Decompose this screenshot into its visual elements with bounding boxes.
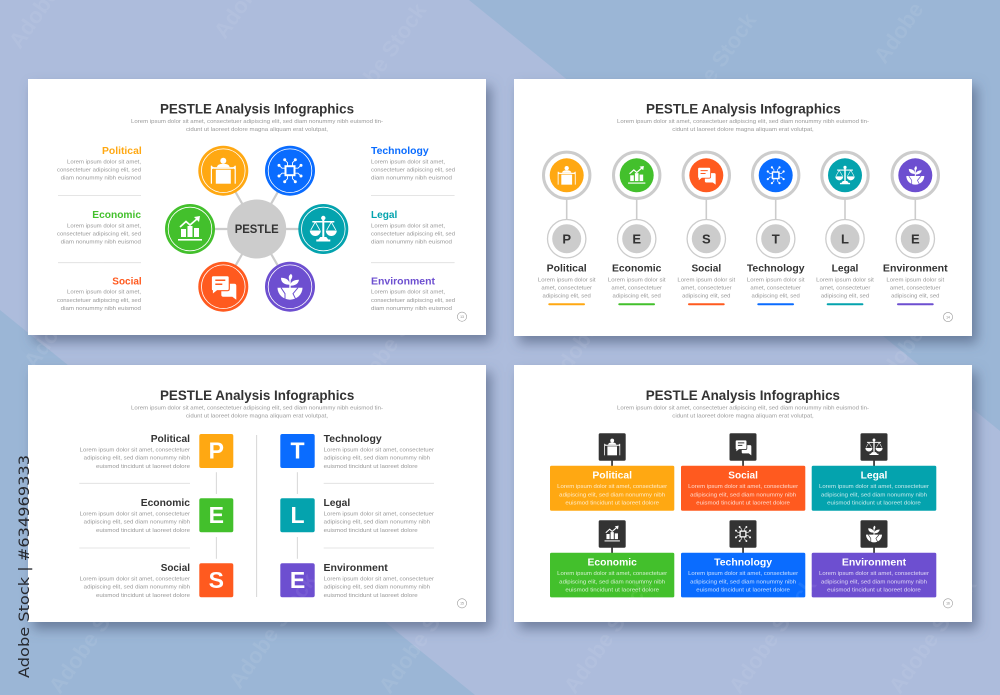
right text: Technology: Technology xyxy=(371,146,429,157)
block: Technology xyxy=(280,434,434,470)
subtitle: Lorem ipsum dolor sit amet, consectetuer adipiscing elit, sed diam nonummy nibh euismod tin- xyxy=(131,119,383,125)
subtitle: cidunt ut laoreet dolore magna aliquam erat volutpat, xyxy=(672,127,814,133)
column: Economic: Lorem ipsum dolor sit xyxy=(608,277,666,283)
left text: Political: Lorem ipsum dolor sit amet, xyxy=(67,159,141,165)
watermark: repeated stock text: Adobe Stock xyxy=(344,278,442,403)
block: Environment: euismod tincidunt ut laoreet dolore xyxy=(324,593,418,599)
right text: Technology: diam nonummy nibh euismod xyxy=(371,176,452,182)
right text: Technology: Lorem ipsum dolor sit amet, xyxy=(371,159,445,165)
right text: Environment: diam nonummy nibh euismod xyxy=(371,306,452,312)
page number xyxy=(457,312,467,321)
block: Social: Social xyxy=(161,563,190,574)
column: Legal: amet, consectetuer xyxy=(820,286,870,292)
subtitle xyxy=(617,405,869,419)
watermark: repeated stock text: Adobe Stock xyxy=(884,573,982,695)
card: Legal xyxy=(812,433,936,511)
page number xyxy=(943,312,953,322)
right text: Environment: Environment xyxy=(371,277,436,288)
right text: Technology xyxy=(371,146,455,182)
title: PESTLE Analysis Infographics xyxy=(160,388,355,403)
left text: Social: consectetuer adipiscing elit, sed xyxy=(57,298,141,304)
column: Social: Lorem ipsum dolor sit xyxy=(677,277,736,283)
title: PESTLE Analysis Infographics xyxy=(160,102,354,116)
block: Technology: adipiscing elit, sed diam nonummy nibh xyxy=(324,456,430,462)
column: Political: amet, consectetuer xyxy=(541,286,592,292)
card: Economic: adipiscing elit, sed diam nonummy nibh xyxy=(559,579,665,585)
block: Environment xyxy=(280,563,434,599)
card: Technology: Technology xyxy=(714,558,772,569)
block: Technology: T xyxy=(290,438,305,464)
column: Technology: T xyxy=(772,231,780,246)
column: Legal: Legal xyxy=(832,264,858,275)
page number xyxy=(457,599,467,608)
stock id side label: Adobe Stock | #634969333 xyxy=(17,455,33,678)
panel: letter squares slide xyxy=(28,365,486,622)
subtitle: Lorem ipsum dolor sit amet, consectetuer adipiscing elit, sed diam nonummy nibh euismod tin- xyxy=(131,405,383,411)
right text: Environment xyxy=(371,277,455,312)
card: Technology xyxy=(681,520,805,597)
watermark: repeated stock text: Adobe Stock xyxy=(724,573,822,695)
block: Legal: euismod tincidunt ut laoreet dolore xyxy=(324,528,418,534)
subtitle: Lorem ipsum dolor sit amet, consectetuer adipiscing elit, sed diam nonummy nibh euismod tin- xyxy=(617,119,869,125)
watermark: repeated stock text: Adobe Stock xyxy=(869,268,967,393)
card: Political: Lorem ipsum dolor sit amet, consectetuer xyxy=(557,484,667,490)
column: Legal: L xyxy=(841,231,849,246)
block: Social: Lorem ipsum dolor sit amet, consectetuer xyxy=(80,576,190,582)
right text: Environment: consectetuer adipiscing elit, sed xyxy=(371,298,455,304)
right text: Legal xyxy=(371,210,455,246)
page number: 14 xyxy=(946,315,950,319)
page number xyxy=(943,599,953,608)
card: Political: adipiscing elit, sed diam nonummy nibh xyxy=(559,492,665,498)
right text: Technology: consectetuer adipiscing elit, sed xyxy=(371,167,455,173)
watermark: repeated stock text: Adobe Stock xyxy=(374,573,472,695)
page number: 15 xyxy=(460,602,464,606)
block: Social: S xyxy=(209,567,224,593)
block: Environment: E xyxy=(290,567,305,593)
column: Social: adipiscing elit, sed xyxy=(682,294,730,300)
card: Technology: Lorem ipsum dolor sit amet, consectetuer xyxy=(688,571,798,577)
column: Legal xyxy=(816,152,874,305)
right text: Legal: Legal xyxy=(371,210,397,221)
card: Social: adipiscing elit, sed diam nonummy nibh xyxy=(690,492,796,498)
column: Environment: adipiscing elit, sed xyxy=(891,294,939,300)
column: Technology: adipiscing elit, sed xyxy=(752,294,800,300)
panel: colored cards slide xyxy=(514,365,972,622)
card: Technology: euismod tincidunt ut laoreet dolore xyxy=(696,587,790,593)
subtitle: cidunt ut laoreet dolore magna aliquam erat volutpat, xyxy=(186,413,328,419)
card: Legal: adipiscing elit, sed diam nonummy nibh xyxy=(821,492,927,498)
subtitle xyxy=(617,119,869,133)
block: Economic: adipiscing elit, sed diam nonummy nibh xyxy=(84,520,190,526)
card: Legal: euismod tincidunt ut laoreet dolore xyxy=(827,500,921,506)
icon: economic xyxy=(165,204,215,254)
right text: Legal: Lorem ipsum dolor sit amet, xyxy=(371,223,445,229)
block: Legal: L xyxy=(290,502,305,528)
block: Political xyxy=(80,434,233,470)
right text: Environment: Lorem ipsum dolor sit amet, xyxy=(371,290,445,296)
column: Political: Lorem ipsum dolor sit xyxy=(538,277,596,283)
column: Social: S xyxy=(702,231,711,246)
left text: Social: Social xyxy=(112,277,142,288)
block: Economic: Economic xyxy=(141,498,190,509)
column: Social: Social xyxy=(691,264,721,275)
left text: Social: Lorem ipsum dolor sit amet, xyxy=(67,290,141,296)
watermark: repeated stock text: Adobe Stock xyxy=(44,573,142,695)
column: Technology xyxy=(747,152,805,305)
column: Economic: adipiscing elit, sed xyxy=(613,294,661,300)
card: Social: Lorem ipsum dolor sit amet, consectetuer xyxy=(688,484,798,490)
left text: Social: diam nonummy nibh euismod xyxy=(61,306,141,312)
icon: legal xyxy=(298,204,348,254)
subtitle: cidunt ut laoreet dolore magna aliquam erat volutpat, xyxy=(672,413,814,419)
block: Environment: Lorem ipsum dolor sit amet, consectetuer xyxy=(324,576,434,582)
page number: 16 xyxy=(946,602,950,606)
left text: Political xyxy=(57,146,142,182)
column: Technology: amet, consectetuer xyxy=(750,286,801,292)
card: Social: euismod tincidunt ut laoreet dolore xyxy=(696,500,790,506)
block: Legal: Legal xyxy=(324,498,350,509)
column: Economic: Economic xyxy=(612,264,662,275)
watermark: repeated stock text: Adobe Stock xyxy=(664,8,762,133)
card: Economic xyxy=(550,520,674,597)
column: Technology: Technology xyxy=(747,264,805,275)
column: Technology: Lorem ipsum dolor sit xyxy=(747,277,805,283)
card: Economic: euismod tincidunt ut laoreet dolore xyxy=(565,587,659,593)
card: Political: Political xyxy=(592,471,632,482)
block: Economic: euismod tincidunt ut laoreet dolore xyxy=(96,528,190,534)
block: Technology: Lorem ipsum dolor sit amet, consectetuer xyxy=(324,447,434,453)
column: Environment: amet, consectetuer xyxy=(890,286,941,292)
block: Environment: adipiscing elit, sed diam nonummy nibh xyxy=(324,585,430,591)
card: Technology: adipiscing elit, sed diam nonummy nibh xyxy=(690,579,796,585)
card: Political: euismod tincidunt ut laoreet dolore xyxy=(565,500,659,506)
block: Technology: Technology xyxy=(324,434,382,445)
left text: Social xyxy=(57,277,142,312)
column: Economic xyxy=(608,152,666,305)
block: Political: Political xyxy=(151,434,190,445)
column: Legal: Lorem ipsum dolor sit xyxy=(816,277,874,283)
column: Environment: Lorem ipsum dolor sit xyxy=(886,277,945,283)
card: Environment: adipiscing elit, sed diam nonummy nibh xyxy=(821,579,927,585)
column: Social: amet, consectetuer xyxy=(681,286,732,292)
card: Legal: Legal xyxy=(861,471,887,482)
card: Environment: Environment xyxy=(842,558,907,569)
block: Social xyxy=(80,563,233,599)
column: Economic: E xyxy=(632,231,641,246)
left text: Political: consectetuer adipiscing elit, sed xyxy=(57,167,141,173)
block: Environment: Environment xyxy=(324,563,388,574)
icon: environment xyxy=(265,262,315,312)
left text: Economic xyxy=(57,210,141,246)
block: Social: euismod tincidunt ut laoreet dolore xyxy=(96,593,190,599)
column: Economic: amet, consectetuer xyxy=(611,286,662,292)
card: Legal: Lorem ipsum dolor sit amet, consectetuer xyxy=(819,484,929,490)
left text: Economic: consectetuer adipiscing elit, sed xyxy=(57,231,141,237)
block: Legal: Lorem ipsum dolor sit amet, consectetuer xyxy=(324,511,434,517)
title: PESTLE Analysis Infographics xyxy=(646,388,840,403)
card: Political xyxy=(550,433,674,511)
title: PESTLE Analysis Infographics xyxy=(646,102,841,116)
watermark: repeated stock text: Adobe Stock xyxy=(19,248,117,373)
block: Legal: adipiscing elit, sed diam nonummy nibh xyxy=(324,520,430,526)
block: Political: P xyxy=(209,438,224,464)
block: Legal xyxy=(280,498,434,534)
left text: Economic: diam nonummy nibh euismod xyxy=(61,240,141,246)
block: Economic: E xyxy=(209,502,224,528)
left text: Economic: Lorem ipsum dolor sit amet, xyxy=(67,223,141,229)
block: Social: adipiscing elit, sed diam nonummy nibh xyxy=(84,585,190,591)
page number: 13 xyxy=(460,315,464,319)
block: Political: Lorem ipsum dolor sit amet, consectetuer xyxy=(80,447,190,453)
right text: Legal: consectetuer adipiscing elit, sed xyxy=(371,231,455,237)
block: Technology: euismod tincidunt ut laoreet dolore xyxy=(324,464,418,470)
panel: timeline slide xyxy=(514,79,972,336)
block: Political: adipiscing elit, sed diam nonummy nibh xyxy=(84,456,190,462)
card: Environment: Lorem ipsum dolor sit amet, consectetuer xyxy=(819,571,929,577)
left text: Political: Political xyxy=(102,146,142,157)
column: Environment: E xyxy=(911,231,920,246)
watermark: repeated stock text: Adobe Stock xyxy=(334,0,432,123)
card: Economic: Lorem ipsum dolor sit amet, consectetuer xyxy=(557,571,667,577)
card: Social: Social xyxy=(728,471,758,482)
card: Social xyxy=(681,433,805,511)
card: Environment xyxy=(812,520,936,597)
column: Political: adipiscing elit, sed xyxy=(543,294,591,300)
panel: radial PESTLE slide xyxy=(28,79,486,335)
card: Economic: Economic xyxy=(588,558,637,569)
column: Environment: Environment xyxy=(883,264,948,275)
hub: PESTLE: PESTLE xyxy=(235,222,279,236)
watermark: repeated stock text: Adobe Stock xyxy=(544,263,642,388)
block: Political: euismod tincidunt ut laoreet dolore xyxy=(96,464,190,470)
column: Environment xyxy=(883,152,948,305)
icon: social xyxy=(198,262,248,312)
subtitle: cidunt ut laoreet dolore magna aliquam erat volutpat, xyxy=(186,127,328,133)
right text: Legal: diam nonummy nibh euismod xyxy=(371,240,452,246)
column: Political: Political xyxy=(547,264,587,275)
watermark: repeated stock text: Adobe Stock xyxy=(224,568,322,693)
column: Political xyxy=(538,152,596,305)
subtitle xyxy=(131,405,383,419)
icon: technology xyxy=(265,146,315,196)
watermark: repeated stock text: Adobe Stock xyxy=(559,573,657,695)
left text: Political: diam nonummy nibh euismod xyxy=(61,176,141,182)
icon: political xyxy=(198,146,248,196)
subtitle xyxy=(131,119,383,133)
column: Legal: adipiscing elit, sed xyxy=(821,294,869,300)
hub: PESTLE xyxy=(227,200,286,258)
card: Environment: euismod tincidunt ut laoreet dolore xyxy=(827,587,921,593)
block: Economic: Lorem ipsum dolor sit amet, consectetuer xyxy=(80,511,190,517)
column: Social xyxy=(677,152,736,305)
block: Economic xyxy=(80,498,233,534)
column: Political: P xyxy=(562,231,571,246)
left text: Economic: Economic xyxy=(92,210,141,221)
subtitle: Lorem ipsum dolor sit amet, consectetuer adipiscing elit, sed diam nonummy nibh euismod tin- xyxy=(617,405,869,411)
